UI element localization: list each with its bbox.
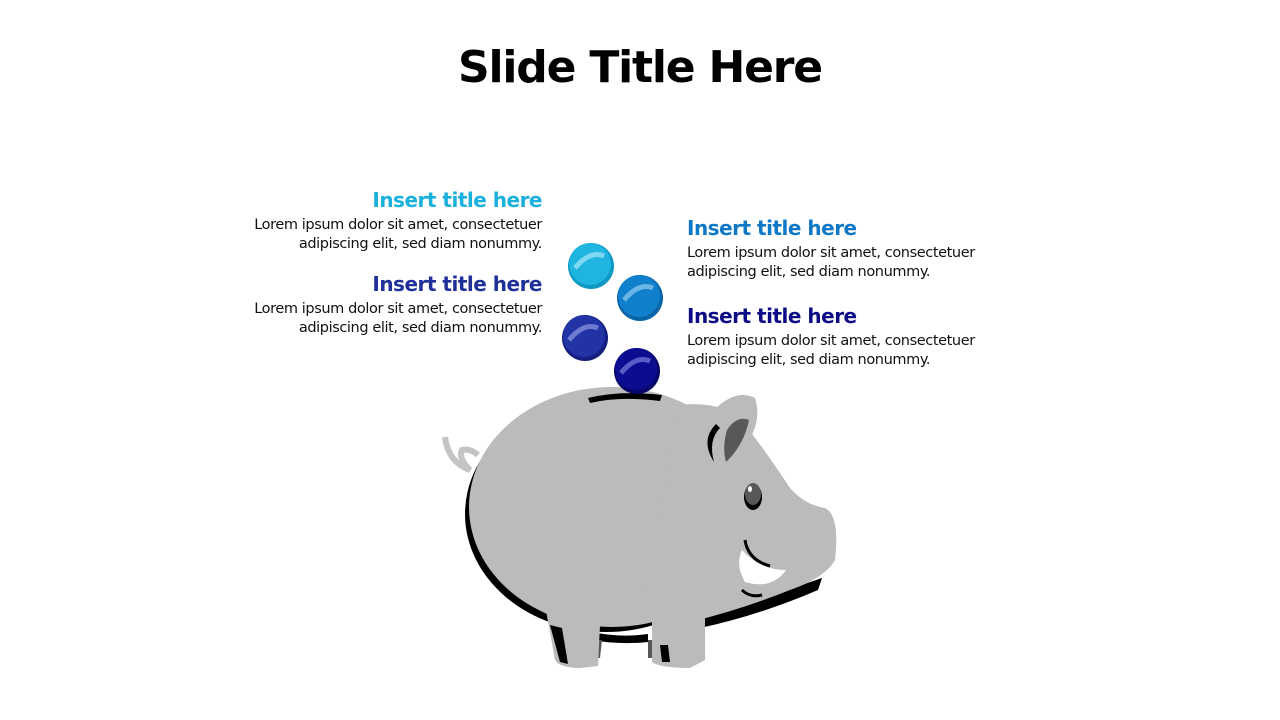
- heading: Insert title here: [687, 216, 857, 240]
- body: [687, 245, 976, 280]
- body: [254, 217, 542, 252]
- body: Lorem ipsum dolor sit amet, consectetuer: [254, 301, 542, 317]
- body: Lorem ipsum dolor sit amet, consectetuer: [687, 245, 975, 261]
- heading: Insert title here: [687, 304, 857, 328]
- title: Slide Title Here: [458, 42, 822, 93]
- icon: coin blue: [617, 275, 663, 321]
- body: Lorem ipsum dolor sit amet, consectetuer: [687, 333, 975, 349]
- text block: left 2: [254, 272, 542, 336]
- icon: coin navy: [614, 348, 660, 394]
- body: adipiscing elit, sed diam nonummy.: [299, 236, 542, 252]
- heading: Insert title here: [372, 188, 542, 212]
- body: adipiscing elit, sed diam nonummy.: [687, 352, 930, 368]
- body: [687, 333, 976, 368]
- body: adipiscing elit, sed diam nonummy.: [299, 320, 542, 336]
- icon: pig body: [465, 387, 836, 632]
- icon: pig legs: [545, 605, 705, 668]
- body: [254, 301, 542, 336]
- icon: coin dark blue: [562, 315, 608, 361]
- body: Lorem ipsum dolor sit amet, consectetuer: [254, 217, 542, 233]
- icon: pig tail: [445, 437, 478, 470]
- body: adipiscing elit, sed diam nonummy.: [687, 264, 930, 280]
- slot: [588, 393, 662, 403]
- heading: Insert title here: [372, 272, 542, 296]
- icon: coin cyan: [568, 243, 614, 289]
- text block: right 2: [687, 304, 976, 368]
- text block: right 1: [687, 216, 976, 280]
- text block: left 1: [254, 188, 542, 252]
